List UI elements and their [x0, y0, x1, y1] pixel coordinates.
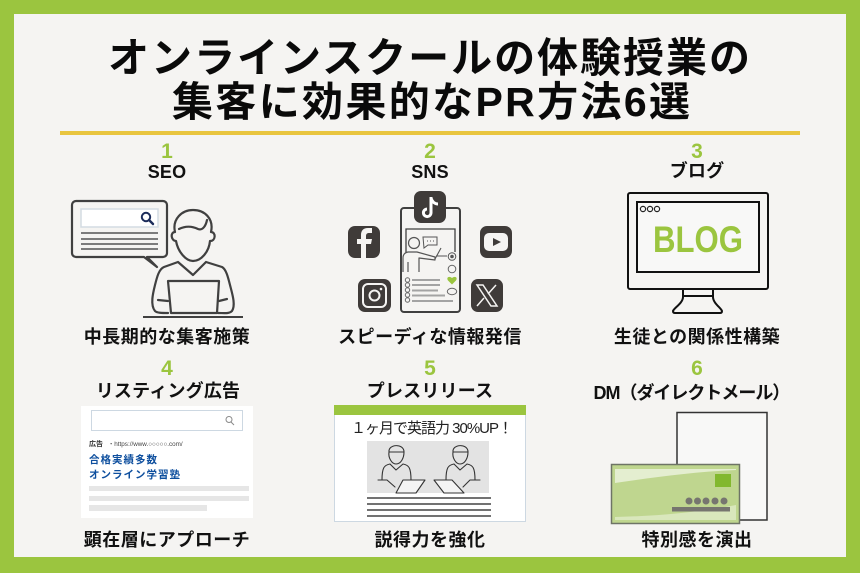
panel: 5 press release	[334, 357, 526, 550]
icon: YouTube	[480, 226, 512, 258]
panel: 2 SNS	[338, 140, 522, 347]
heading: リスティング広告: リスティング広告	[96, 380, 240, 401]
number 5: 5	[424, 357, 436, 380]
illustration: search result ad: オンライン学習塾	[89, 468, 181, 481]
illustration: press release sheet	[334, 405, 526, 522]
illustration: letter sheet	[677, 412, 767, 520]
heading: プレスリリース: プレスリリース	[367, 381, 493, 401]
title: オンラインスクールの体験授業の	[108, 35, 750, 81]
title	[108, 35, 750, 125]
illustration: press release sheet: １ヶ月で英語力 30%UP！	[351, 419, 513, 437]
icon: X	[471, 279, 503, 312]
illustration: search result ad	[81, 406, 253, 518]
panel: 6 direct mail	[594, 357, 790, 550]
icon: smartphone with teacher	[401, 208, 460, 312]
illustration: search result ad: ・https://www.○○○○○.com/	[108, 441, 183, 448]
icon: monitor with BLOG screen: BLOG	[653, 219, 743, 260]
caption: スピーディな情報発信: スピーディな情報発信	[338, 326, 522, 347]
number 2: 2	[424, 140, 436, 163]
caption: 顕在層にアプローチ: 顕在層にアプローチ	[84, 530, 250, 550]
panel: 4 listing ads	[81, 357, 253, 550]
number 4: 4	[161, 357, 173, 380]
illustration: search result ad: 広告	[89, 439, 103, 448]
number 6: 6	[691, 357, 703, 380]
caption: 特別感を演出: 特別感を演出	[642, 529, 752, 550]
caption: 中長期的な集客施策: 中長期的な集客施策	[84, 327, 250, 347]
caption: 説得力を強化: 説得力を強化	[374, 530, 486, 550]
icon: Instagram	[358, 279, 391, 312]
icon: monitor with BLOG screen	[628, 193, 768, 313]
heading: SNS: SNS	[411, 162, 449, 182]
icon: TikTok	[414, 191, 446, 223]
heading: DM（ダイレクトメール）: DM（ダイレクトメール）	[594, 382, 790, 403]
illustration: search result ad: 合格実績多数	[89, 453, 158, 466]
heading: SEO: SEO	[148, 162, 186, 182]
panel: 3 blog	[614, 140, 780, 347]
title: 集客に効果的なPR方法6選	[172, 79, 690, 125]
panel: 1 SEO	[72, 140, 250, 347]
icon: person at laptop with search speech bubble	[72, 201, 243, 317]
number 3: 3	[691, 140, 703, 163]
illustration: green envelope	[612, 464, 740, 524]
caption: 生徒との関係性構築: 生徒との関係性構築	[614, 326, 780, 347]
icon: Facebook	[348, 226, 380, 258]
heading: ブログ: ブログ	[670, 160, 724, 181]
number 1: 1	[161, 140, 173, 163]
